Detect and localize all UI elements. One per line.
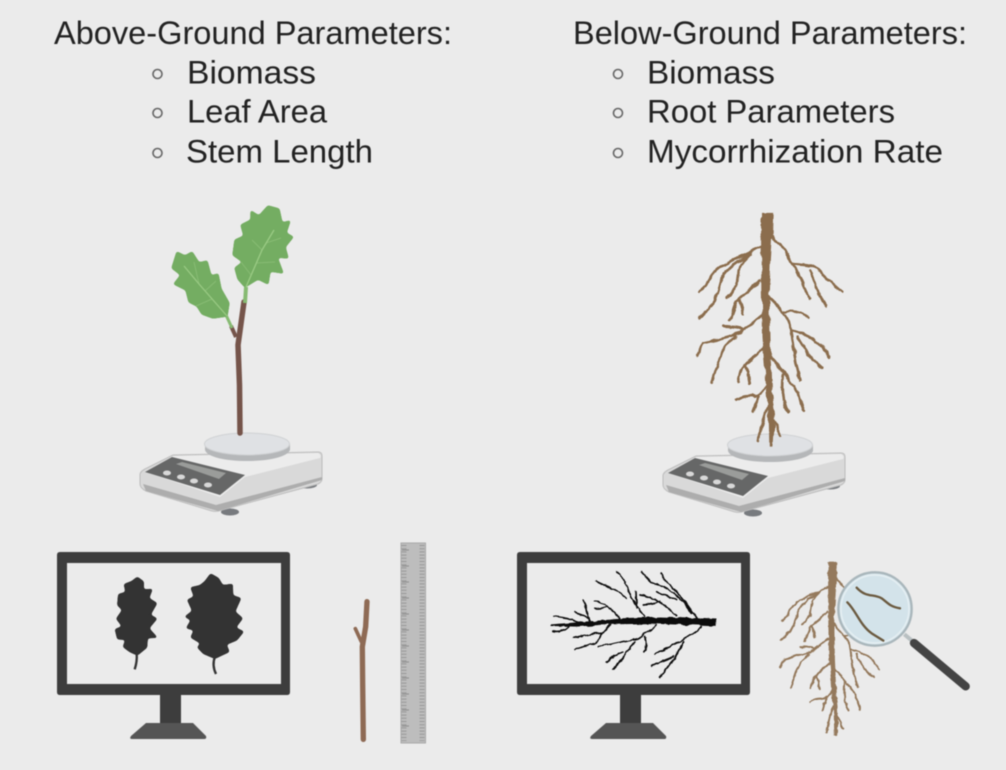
icon: root system on a balance [663,213,845,516]
list: above-ground measurements [153,54,373,170]
heading: below-ground parameters: Below-Ground Parameters: [573,15,967,51]
list: below-ground measurements: Root Parameters [647,94,895,130]
list: above-ground measurements: Biomass [187,54,316,90]
heading: above-ground parameters: Above-Ground Parameters: [54,15,452,51]
icon: stem segment [355,602,367,739]
list: above-ground measurements: Leaf Area [187,94,328,130]
icon: monitor with scanned root [517,552,750,739]
list: below-ground measurements [614,54,943,170]
panel: below-ground parameters [517,15,967,739]
icon: oak seedling on a balance [140,206,322,516]
list: below-ground measurements: Biomass [647,54,775,90]
list: below-ground measurements: Mycorrhization Rate [647,134,943,170]
icon: root under magnifying glass [780,562,966,736]
icon: ruler [401,543,426,743]
panel: above-ground parameters [54,15,452,743]
list: above-ground measurements: Stem Length [186,134,373,170]
icon: monitor with scanned leaves [57,552,290,739]
